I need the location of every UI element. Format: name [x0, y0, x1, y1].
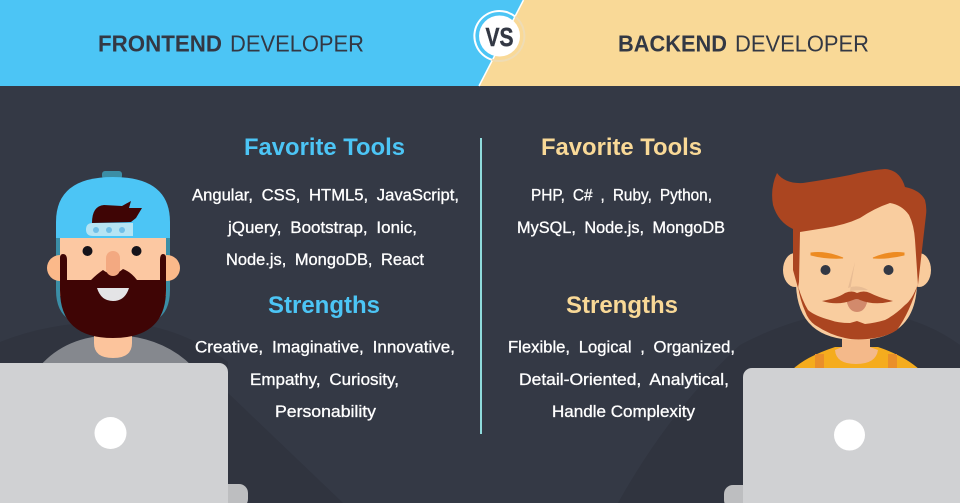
- right eye: [132, 246, 142, 256]
- right background shadow shape: [618, 310, 960, 503]
- laptop lid: [0, 363, 228, 503]
- illustration: backend developer with red hair and moustache: [724, 169, 960, 503]
- header: diagonal white separator: [479, 0, 524, 86]
- text: frontend tools list: [192, 186, 459, 269]
- lip: [846, 298, 868, 312]
- panel: frontend text: [192, 134, 459, 421]
- right suspender: [888, 354, 897, 370]
- text: frontend tools list: jQuery, Bootstrap, Ionic,: [227, 219, 417, 237]
- header band: [0, 0, 960, 86]
- text: backend tools list: PHP, C# , Ruby, Python,: [531, 186, 712, 204]
- cap strap: [86, 223, 133, 236]
- text: frontend tools list: Node.js, MongoDB, React: [226, 251, 424, 269]
- left eyebrow: [811, 253, 843, 258]
- text: backend tools list: [517, 186, 725, 237]
- beard: [60, 254, 166, 338]
- text: frontend strengths list: Personability: [275, 403, 377, 421]
- laptop logo: [94, 417, 126, 449]
- beard: [798, 284, 918, 340]
- right eyebrow: [873, 253, 904, 258]
- illustration: frontend developer with cap and beard: [0, 171, 248, 503]
- heading: frontend developer: DEVELOPER: [230, 30, 364, 56]
- text: backend strengths list: Handle Complexity: [552, 403, 696, 421]
- face: [796, 198, 917, 340]
- header: frontend blue side: [0, 0, 525, 86]
- text: backend strengths list: Detail-Oriented, Analytical,: [519, 371, 729, 389]
- left ear: [47, 255, 73, 281]
- heading: frontend favorite tools: Favorite Tools: [244, 134, 405, 161]
- heading: frontend strengths: Strengths: [268, 292, 380, 319]
- heading: backend developer: BACKEND: [618, 30, 727, 56]
- right ear: [907, 253, 931, 287]
- VS badge: [474, 11, 524, 61]
- text: frontend tools list: Angular, CSS, HTML5, JavaScript,: [192, 186, 459, 204]
- hair and sideburns: [772, 169, 926, 288]
- neck: [94, 330, 132, 358]
- heading: backend strengths: Strengths: [566, 292, 678, 319]
- VS badge: VS: [486, 24, 514, 52]
- left eye: [82, 246, 92, 256]
- heading: frontend developer: [98, 30, 364, 56]
- left suspender: [815, 354, 824, 370]
- moustache: [822, 292, 893, 303]
- shirt: [40, 335, 192, 366]
- face: [60, 236, 166, 296]
- center divider: [480, 138, 482, 434]
- strap holes: [93, 227, 125, 233]
- cap: [56, 177, 170, 238]
- text: backend strengths list: [508, 338, 735, 421]
- nose: [106, 251, 120, 276]
- cap hair tuft: [92, 201, 142, 223]
- cap button: [102, 171, 122, 179]
- shirt: [792, 347, 920, 370]
- left eye: [820, 265, 830, 275]
- laptop logo: [834, 420, 865, 450]
- nose shadow: [848, 262, 868, 291]
- text: backend tools list: MySQL, Node.js, MongoDB: [517, 219, 725, 237]
- header: backend yellow side: [479, 0, 960, 86]
- left ear: [783, 253, 807, 287]
- text: frontend strengths list: Empathy, Curiosity,: [250, 371, 399, 389]
- panel: backend text: [508, 134, 735, 421]
- text: backend strengths list: Flexible, Logical , Organized,: [508, 338, 735, 356]
- heading: frontend developer: FRONTEND: [98, 30, 222, 56]
- right eye: [884, 265, 894, 275]
- laptop lid: [743, 368, 960, 503]
- back hair shade: [56, 236, 170, 320]
- laptop base: [200, 484, 248, 503]
- heading: backend developer: [618, 30, 869, 56]
- neck and chest: [835, 335, 878, 364]
- heading: backend developer: DEVELOPER: [735, 30, 869, 56]
- text: frontend strengths list: [195, 338, 455, 421]
- right ear: [154, 255, 180, 281]
- smile: [97, 288, 129, 301]
- text: frontend strengths list: Creative, Imaginative, Innovative,: [195, 338, 455, 356]
- left background shadow shape: [0, 322, 343, 503]
- laptop base: [724, 485, 774, 503]
- heading: backend favorite tools: Favorite Tools: [541, 134, 702, 161]
